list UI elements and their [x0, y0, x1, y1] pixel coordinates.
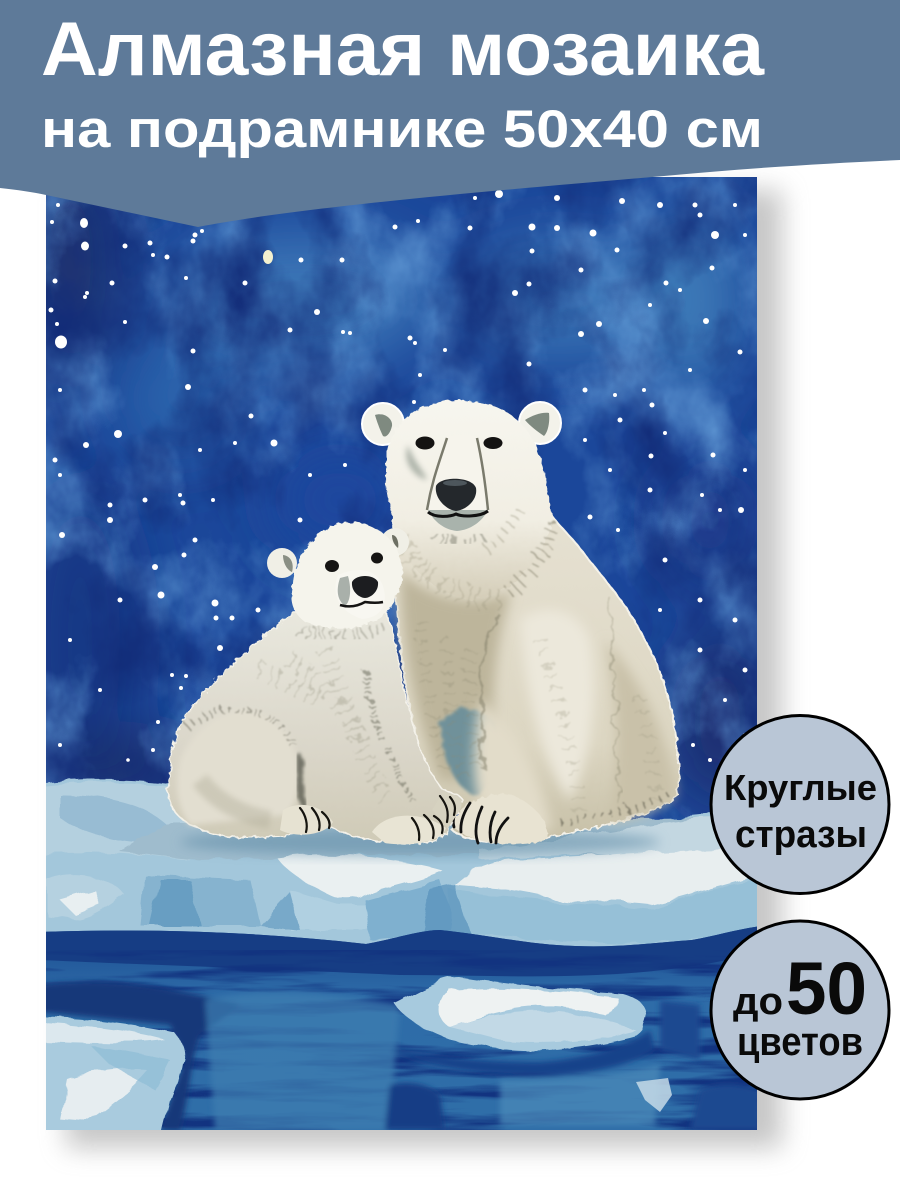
badge: up to 50 colours: до — [733, 981, 783, 1023]
neck fur — [505, 523, 553, 595]
badge: round rhinestones — [711, 716, 889, 894]
small bear face — [325, 560, 339, 572]
water — [40, 925, 770, 1135]
stars — [48, 190, 748, 762]
big bear cheek shading — [406, 445, 426, 480]
night sky — [46, 177, 757, 820]
badge: up to 50 colours: цветов — [737, 1020, 863, 1064]
small bear body — [168, 610, 463, 843]
shadow under bears — [180, 828, 660, 856]
badge: up to 50 colours — [711, 921, 889, 1099]
big bear paw — [452, 794, 547, 844]
small bear — [168, 522, 463, 844]
badge: round rhinestones: Круглые — [724, 767, 877, 808]
big bear fur shading — [400, 570, 675, 832]
white ice blocks — [277, 855, 442, 899]
header banner — [0, 0, 900, 227]
big bear head — [385, 400, 553, 600]
small bear fur shading — [177, 625, 412, 825]
badge: up to 50 colours: 50 — [786, 947, 867, 1030]
big bear nose and mouth — [436, 479, 476, 511]
ice shelf — [30, 780, 775, 950]
small bear paws — [280, 805, 333, 835]
subtitle: на подрамнике 50х40 см — [41, 100, 763, 159]
canvas drop shadow — [66, 190, 782, 1148]
big bear — [362, 400, 679, 844]
big bear body — [393, 510, 679, 843]
big bear muzzle — [427, 435, 488, 531]
painting: polar bears — [20, 150, 775, 1140]
badge: round rhinestones: стразы — [735, 814, 867, 856]
ice chunk bottom left — [46, 1016, 186, 1130]
small bear head — [291, 522, 402, 628]
title: Алмазная мозаика — [41, 7, 765, 92]
ice floe — [394, 977, 647, 1050]
big bear ears — [362, 402, 561, 445]
small bear ears — [267, 528, 409, 578]
small bear muzzle — [335, 570, 385, 619]
big bear eyes — [416, 436, 434, 450]
